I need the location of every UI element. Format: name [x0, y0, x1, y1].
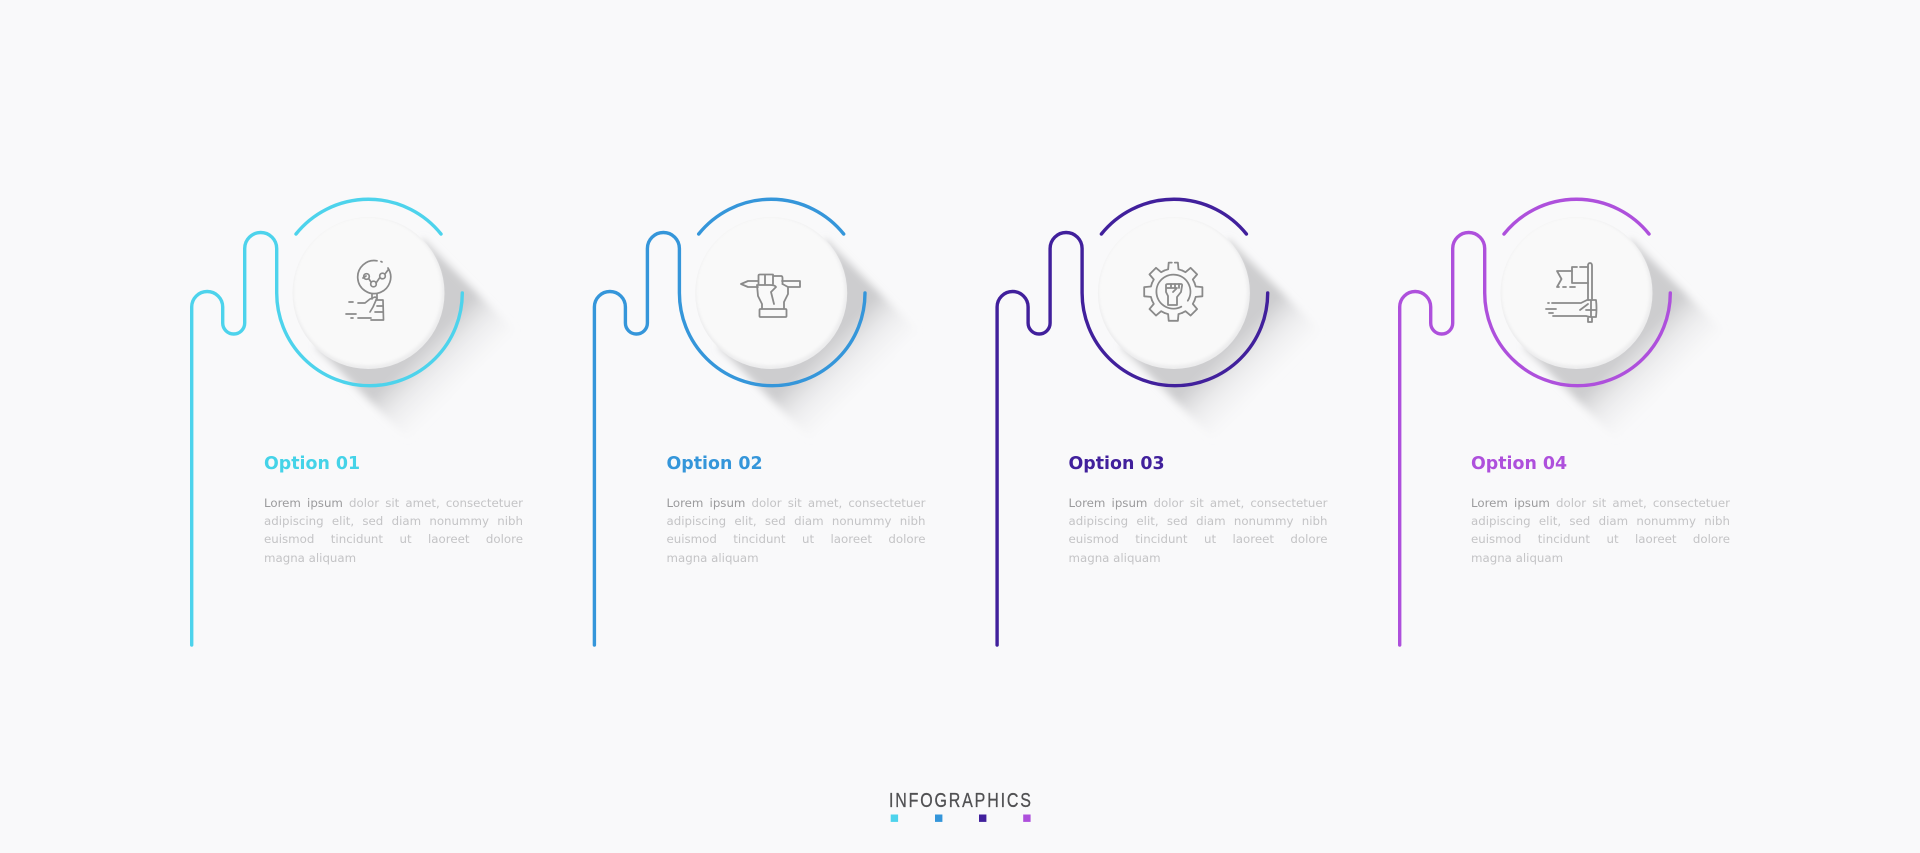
legend squares: [891, 814, 1031, 822]
text block: option 04: Lorem ipsum dolor sit amet, consectetuer: [1471, 496, 1730, 510]
text block: option 04: magna aliquam: [1471, 551, 1563, 565]
text block: option 03: adipiscing elit, sed diam nonummy nibh: [1068, 514, 1328, 528]
text block: option 01: Lorem ipsum dolor sit amet, consectetuer: [264, 496, 523, 510]
disc shadow: [316, 239, 515, 439]
icon: magnifier chart in hand: [346, 261, 391, 320]
step 1: ribbon and disc: [192, 199, 515, 645]
text block: option 03: [1068, 496, 1328, 565]
disc shadow: [1524, 239, 1723, 439]
heading: option 02: Option 02: [666, 454, 763, 474]
text block: option 04: [1471, 496, 1730, 565]
text block: option 01: [264, 496, 523, 565]
disc: [1500, 216, 1652, 369]
text block: option 03: euismod tincidunt ut laoreet dolore: [1068, 532, 1328, 546]
step 3: ribbon and disc: [997, 199, 1320, 645]
text block: option 03: magna aliquam: [1068, 551, 1161, 565]
top arc: [296, 199, 441, 234]
disc: [292, 216, 444, 369]
top arc: [699, 199, 844, 234]
text block: option 02: magna aliquam: [666, 551, 759, 565]
icon: hand holding flag: [1546, 263, 1596, 322]
heading: option 04: Option 04: [1471, 454, 1567, 474]
step 2: ribbon and disc: [594, 199, 918, 645]
text block: option 04: euismod tincidunt ut laoreet dolore: [1471, 532, 1730, 546]
icon: gear with fist: [1144, 263, 1202, 321]
text block: option 04: adipiscing elit, sed diam nonummy nibh: [1471, 514, 1730, 528]
icon: fist holding pencil: [741, 274, 800, 317]
text block: option 03: Lorem ipsum dolor sit amet, consectetuer: [1068, 496, 1328, 510]
text block: option 02: euismod tincidunt ut laoreet dolore: [666, 532, 926, 546]
heading: option 03: Option 03: [1068, 454, 1165, 474]
disc shadow: [1121, 239, 1320, 439]
heading: option 01: Option 01: [264, 454, 360, 474]
disc shadow: [718, 239, 918, 439]
disc: [1098, 216, 1250, 369]
ribbon line: [594, 232, 865, 645]
step 4: ribbon and disc: [1400, 199, 1723, 645]
top arc: [1504, 199, 1649, 234]
top arc: [1101, 199, 1246, 234]
text block: option 02: [666, 496, 926, 565]
ribbon line: [192, 232, 462, 645]
disc: [695, 216, 847, 369]
text block: option 01: magna aliquam: [264, 551, 356, 565]
text block: option 02: Lorem ipsum dolor sit amet, consectetuer: [666, 496, 926, 510]
text block: option 01: adipiscing elit, sed diam nonummy nibh: [264, 514, 523, 528]
footer title: INFOGRAPHICS: [889, 788, 1031, 811]
ribbon line: [997, 232, 1268, 645]
ribbon line: [1400, 232, 1670, 645]
text block: option 01: euismod tincidunt ut laoreet dolore: [264, 532, 523, 546]
footer title: [889, 788, 1031, 822]
text block: option 02: adipiscing elit, sed diam nonummy nibh: [666, 514, 926, 528]
